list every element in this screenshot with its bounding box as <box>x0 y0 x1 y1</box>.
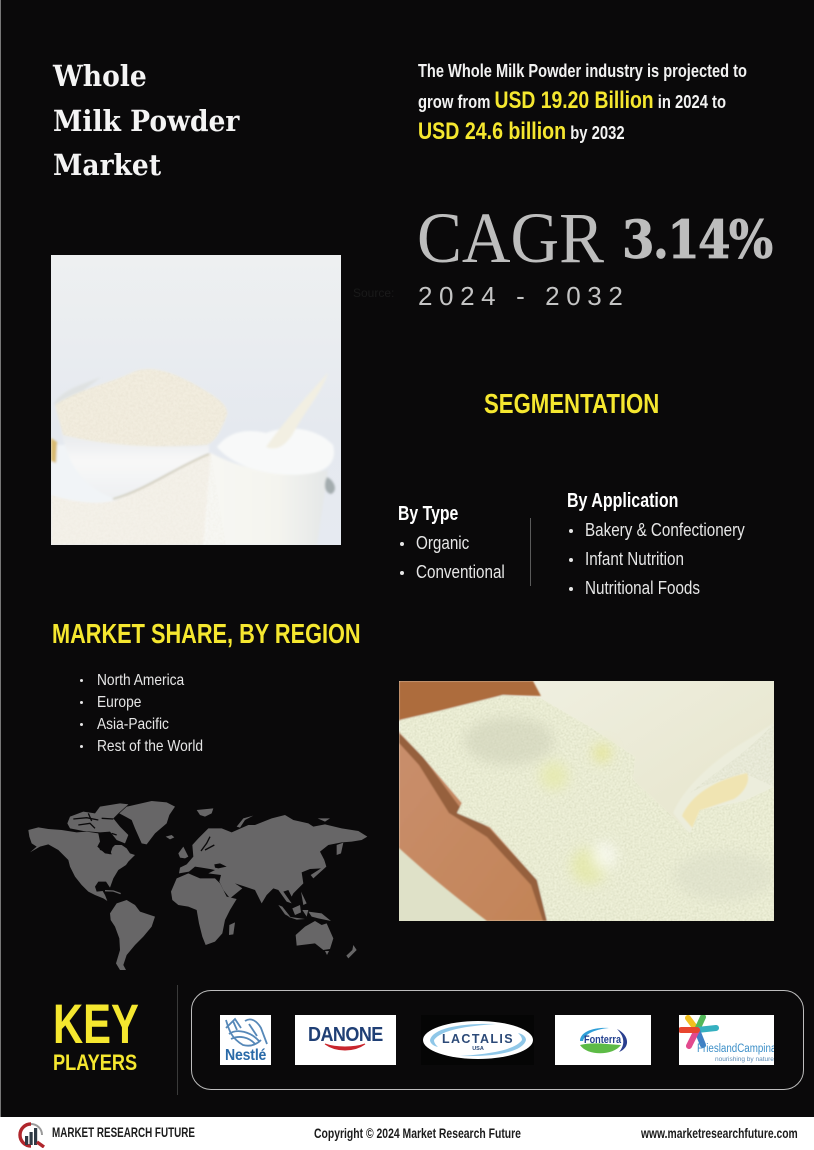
foreground powder <box>51 453 226 545</box>
region list <box>80 672 203 755</box>
players word: PLAYERS <box>53 1050 137 1075</box>
back powder mound <box>673 723 774 841</box>
logo: FrieslandCampina <box>679 1015 774 1065</box>
CAGR period: 2024 - 2032 <box>418 281 629 311</box>
market projection text: The Whole Milk Powder industry is projected to <box>418 60 747 81</box>
CAGR value: CAGR <box>417 198 604 278</box>
world map <box>28 801 368 970</box>
Europe, Asia, Africa, Oceania <box>171 808 367 958</box>
market projection text: grow from USD 19.20 Billion in 2024 to <box>418 87 726 114</box>
footer company name: MARKET RESEARCH FUTURE <box>52 1125 195 1140</box>
logo: Danone <box>295 1015 396 1065</box>
key players heading <box>53 992 139 1075</box>
region list: Europe <box>97 694 141 711</box>
photo: powder in wooden scoop <box>399 681 774 921</box>
segmentation heading: SEGMENTATION <box>484 388 659 419</box>
bowl shadow line <box>113 454 209 499</box>
key word: KEY <box>53 992 139 1055</box>
region list: Asia-Pacific <box>97 716 169 733</box>
logo: FrieslandCampina: FrieslandCampina <box>697 1043 774 1055</box>
logo: Lactalis: LACTALIS <box>442 1032 514 1046</box>
faint source note: Source: <box>353 286 394 300</box>
logo: Lactalis <box>421 1015 534 1065</box>
logo: Nestle <box>220 1015 271 1065</box>
logo: Fonterra <box>555 1015 651 1065</box>
logo: FrieslandCampina: nourishing by nature <box>715 1056 774 1063</box>
footer logo icon <box>18 1122 45 1148</box>
left edge line <box>0 0 1 1117</box>
powder shadows and highlights <box>464 717 774 901</box>
CAGR value: 3.14% <box>622 210 771 271</box>
Americas and Greenland <box>28 801 175 970</box>
logo: Nestle: Nestlé <box>225 1047 266 1064</box>
milk splash <box>266 373 328 448</box>
powder hollow <box>682 773 748 831</box>
by application list: Bakery & Confectionery <box>585 520 745 540</box>
by application heading: By Application <box>567 490 678 512</box>
by application list <box>569 520 745 598</box>
market share heading: MARKET SHARE, BY REGION <box>52 618 361 649</box>
logo: Danone: DANONE <box>308 1024 383 1046</box>
segment: by type <box>398 503 505 582</box>
segment: by application <box>567 490 745 598</box>
powder heap in bowl <box>55 369 227 446</box>
milk foam <box>217 429 334 475</box>
region list: Rest of the World <box>97 738 203 755</box>
region list: North America <box>97 672 184 689</box>
footer website: www.marketresearchfuture.com <box>641 1126 798 1141</box>
title <box>52 59 240 182</box>
title: Market <box>53 148 161 182</box>
CAGR value <box>417 198 772 278</box>
footer bar <box>0 1117 814 1150</box>
by type list: Organic <box>416 533 469 553</box>
scoop rim top <box>399 681 541 721</box>
by application list: Infant Nutrition <box>585 549 684 569</box>
glass of milk <box>203 453 328 545</box>
market projection text <box>418 60 747 145</box>
logo: Lactalis: USA <box>472 1046 484 1052</box>
by type heading: By Type <box>398 503 458 525</box>
by application list: Nutritional Foods <box>585 578 700 598</box>
title: Milk Powder <box>53 104 239 138</box>
footer copyright: Copyright © 2024 Market Research Future <box>314 1126 521 1141</box>
title: Whole <box>53 59 147 93</box>
logo: Fonterra: Fonterra <box>584 1034 621 1046</box>
segment divider <box>530 518 531 586</box>
key players divider <box>177 985 178 1095</box>
key players logo panel <box>191 990 804 1090</box>
main powder mass <box>400 695 774 921</box>
by type list: Conventional <box>416 562 505 582</box>
pale surface behind bowl <box>51 445 126 505</box>
scoop body <box>399 731 549 921</box>
photo: milk powder bowl and glass <box>51 255 341 545</box>
market projection text: USD 24.6 billion by 2032 <box>418 118 625 145</box>
bowl rim <box>53 377 101 405</box>
bowl <box>61 431 209 498</box>
by type list <box>400 533 505 582</box>
